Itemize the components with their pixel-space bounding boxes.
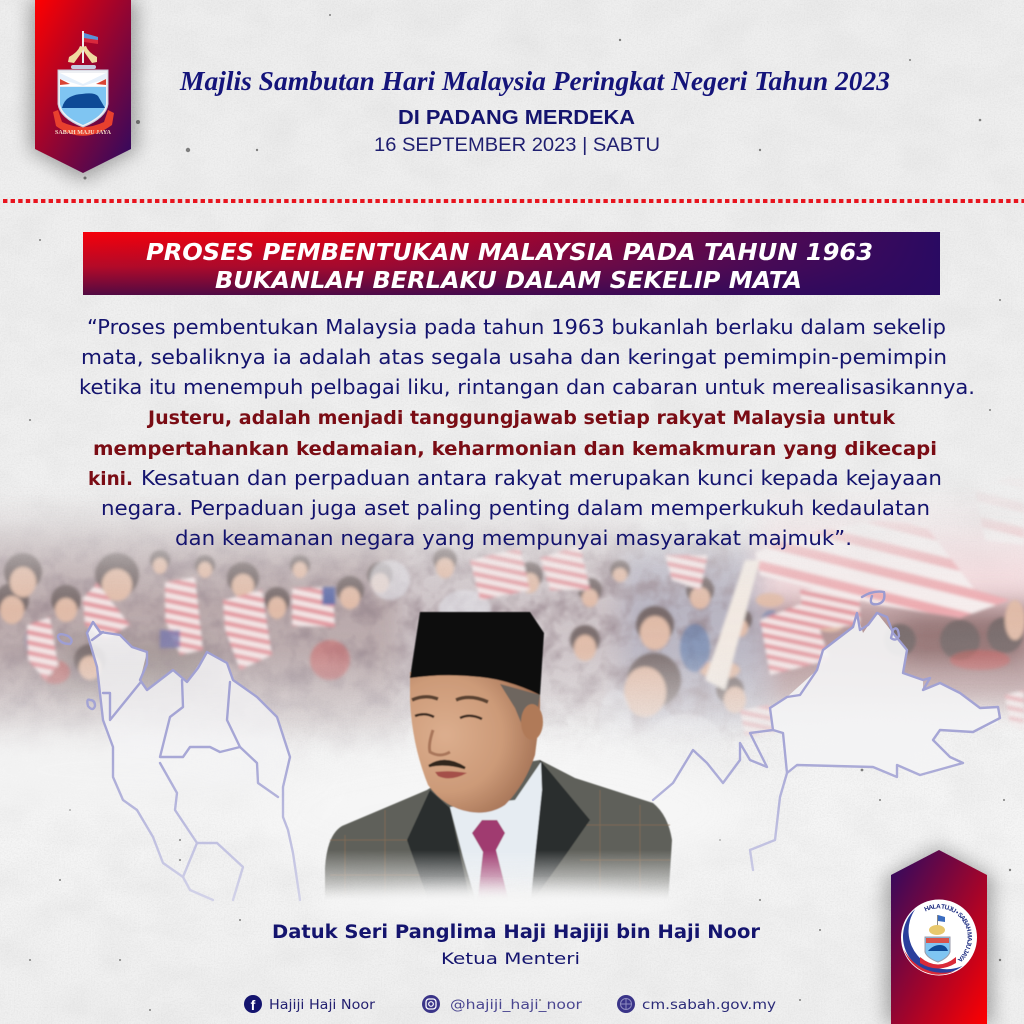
instagram link [422, 995, 583, 1013]
facebook link: Hajiji Haji Noor [269, 997, 375, 1013]
emblem: HALA TUJU • SABAH MAJU JAYA [924, 904, 972, 962]
quote text block [79, 315, 975, 550]
portrait of the Chief Minister [325, 612, 672, 905]
instagram link: @hajiji_haji_noor [450, 997, 583, 1013]
job title: Ketua Menteri [441, 949, 580, 968]
shirt [450, 762, 542, 905]
icon: Sabah coat of arms: SABAH MAJU JAYA [55, 130, 112, 136]
quote text block: ketika itu menempuh pelbagai liku, rintangan dan cabaran untuk merealisasikannya. [79, 375, 975, 399]
quote text block: mata, sebaliknya ia adalah atas segala usaha dan keringat pemimpin-pemimpin [81, 345, 947, 369]
quote text block: mempertahankan kedamaian, keharmonian dan kemakmuran yang dikecapi [93, 438, 937, 460]
facebook link [244, 995, 375, 1013]
left banner with Sabah crest [30, 0, 137, 180]
emblem [901, 900, 977, 976]
tie [472, 820, 506, 894]
right banner with circular emblem [874, 839, 1004, 1024]
crowd details [0, 508, 1024, 736]
website link: cm.sabah.gov.my [642, 997, 776, 1013]
event title [179, 66, 890, 156]
date: 16 SEPTEMBER 2023 | SABTU [374, 134, 660, 156]
neck and face [410, 672, 540, 813]
social media footer [244, 995, 776, 1013]
name of the Chief Minister: Datuk Seri Panglima Haji Hajiji bin Haji Noor [272, 922, 761, 943]
white glow under portrait [310, 891, 690, 919]
headline line 1: PROSES PEMBENTUKAN MALAYSIA PADA TAHUN 1963 [146, 238, 873, 266]
dark lapels [406, 790, 466, 888]
script heading: Majlis Sambutan Hari Malaysia Peringkat Negeri Tahun 2023 [179, 66, 890, 96]
headline bar [83, 232, 940, 295]
soft fade behind person [0, 730, 750, 880]
flag pole [705, 560, 760, 690]
website link [617, 995, 776, 1013]
crowd base tones [0, 490, 1024, 740]
venue: DI PADANG MERDEKA [398, 106, 635, 129]
quote text block: kini. [88, 468, 133, 490]
borneo map [653, 592, 1000, 870]
icon: Sabah coat of arms [53, 31, 114, 136]
quote text block: dan keamanan negara yang mempunyai masyarakat majmuk”. [175, 526, 852, 550]
facebook link: f [251, 997, 256, 1013]
quote text block: Kesatuan dan perpaduan antara rakyat merupakan kunci kepada kejayaan [141, 466, 942, 490]
hand-held flags [24, 508, 1024, 736]
map of Malaysia outline [58, 592, 1000, 900]
quote text block: negara. Perpaduan juga aset paling penting dalam memperkukuh kedaulatan [101, 496, 930, 520]
crowd photo with flags [0, 498, 1024, 748]
large waving flag [755, 520, 1010, 618]
peninsular map [58, 622, 300, 900]
quote text block: “Proses pembentukan Malaysia pada tahun 1963 bukanlah berlaku dalam sekelip [87, 315, 946, 339]
photo-like texture [0, 530, 750, 760]
headline line 2: BUKANLAH BERLAKU DALAM SEKELIP MATA [215, 266, 802, 294]
suit jacket [325, 760, 672, 905]
black songkok hat [410, 612, 544, 695]
quote text block: Justeru, adalah menjadi tanggungjawab setiap rakyat Malaysia untuk [146, 407, 895, 429]
eyes, moustache and mouth [412, 697, 488, 702]
